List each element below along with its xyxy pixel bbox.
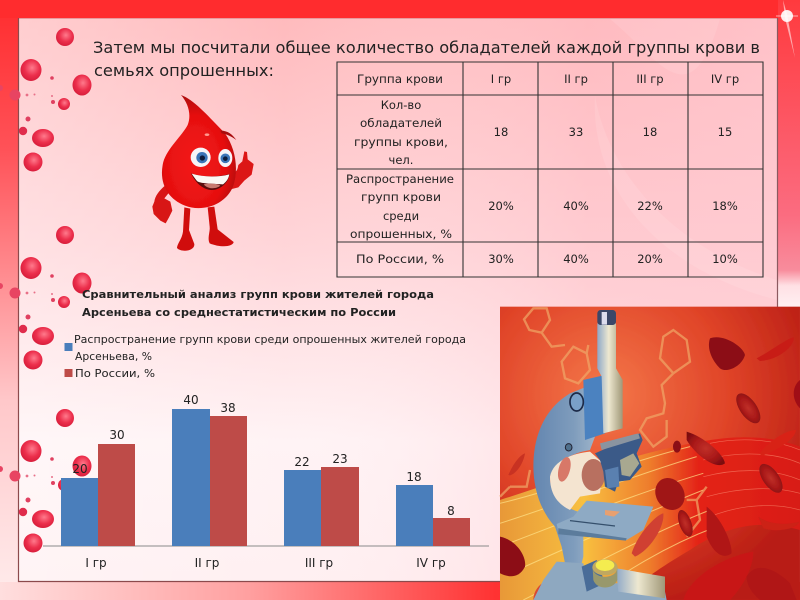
table header row: IV гр [711, 72, 739, 86]
chart title: Арсеньева со среднестатистическим по России [82, 307, 396, 319]
microscope base and light [533, 562, 667, 600]
value labels: 38 [220, 401, 236, 415]
row: prevalence among respondents: 20% [488, 199, 514, 213]
row: prevalence among respondents: среди [383, 209, 419, 223]
row: Russia average: 20% [637, 252, 663, 266]
arm opening [550, 452, 603, 510]
bars: group I [61, 444, 135, 546]
row: Russia average: 30% [488, 252, 514, 266]
row: number of holders: обладателей [360, 116, 442, 130]
objective turret [595, 433, 643, 492]
category labels: IV гр [416, 556, 446, 570]
chart title: Сравнительный анализ групп крови жителей города [82, 289, 434, 301]
category labels: II гр [195, 556, 219, 570]
legend: Арсеньева, % [75, 351, 152, 363]
row: number of holders [354, 98, 732, 167]
category labels: I гр [85, 556, 107, 570]
mouth [191, 173, 230, 190]
sparkle [776, 0, 798, 58]
value labels: 8 [447, 504, 455, 518]
value labels: 22 [294, 455, 310, 469]
molecule outlines [500, 308, 707, 537]
table header row [357, 72, 739, 86]
row: number of holders: 33 [569, 125, 583, 139]
row: prevalence among respondents: Распространение [346, 172, 454, 186]
heading text: Затем мы посчитали общее количество обладателей каждой группы крови в [93, 38, 760, 57]
row: prevalence among respondents [346, 172, 738, 241]
row: Russia average: 10% [712, 252, 738, 266]
value labels: 18 [406, 470, 422, 484]
row: number of holders: Кол-во [381, 98, 421, 112]
value labels: 23 [332, 452, 348, 466]
bars: group IV [396, 485, 470, 546]
table grid [337, 62, 763, 277]
table: blood groups [337, 62, 763, 277]
bars: group II [172, 409, 247, 546]
value labels [72, 393, 455, 518]
row: prevalence among respondents: 40% [563, 199, 589, 213]
red blood cells [500, 337, 800, 600]
legend: Распространение групп крови среди опрошенных жителей города [74, 334, 466, 346]
eyes [191, 148, 211, 167]
bar chart [43, 393, 489, 570]
chart title [82, 289, 434, 319]
left arm and hand [152, 185, 172, 223]
row: prevalence among respondents: опрошенных, % [350, 227, 452, 241]
table header row: II гр [564, 72, 588, 86]
row: number of holders: 18 [643, 125, 657, 139]
value labels: 20 [72, 462, 88, 476]
highlight [205, 133, 209, 136]
stream of light [500, 437, 800, 600]
decorative blood bubbles [0, 28, 92, 552]
legend: По России, % [75, 368, 155, 380]
row: prevalence among respondents: 18% [712, 199, 738, 213]
heading text [93, 38, 760, 80]
table header row: Группа крови [357, 72, 443, 86]
body [162, 95, 236, 208]
row: prevalence among respondents: 22% [637, 199, 663, 213]
focus ring [570, 393, 583, 411]
category labels: III гр [305, 556, 333, 570]
axis [43, 545, 489, 547]
icon: smiling blood drop mascot [152, 95, 254, 251]
microscope arm [533, 387, 600, 570]
row: number of holders: чел. [389, 153, 413, 167]
table header row: I гр [491, 72, 511, 86]
row: prevalence among respondents: групп крови [361, 190, 441, 204]
row: Russia average [356, 252, 738, 266]
image: microscope and red blood cells [500, 307, 800, 600]
row: number of holders: 15 [718, 125, 732, 139]
raised right hand [230, 151, 254, 189]
eyepiece tube [583, 375, 605, 440]
row: Russia average: По России, % [356, 252, 444, 266]
bars: group III [284, 467, 359, 546]
row: number of holders: 18 [494, 125, 508, 139]
row: number of holders: группы крови, [354, 135, 448, 149]
legend [64, 334, 466, 380]
eyebrow [220, 131, 236, 140]
value labels: 30 [109, 428, 125, 442]
stage [557, 501, 653, 540]
heading text: семьях опрошенных: [94, 61, 274, 80]
category labels [85, 556, 446, 570]
row: Russia average: 40% [563, 252, 589, 266]
value labels: 40 [183, 393, 199, 407]
legs [177, 207, 194, 251]
table header row: III гр [636, 72, 664, 86]
